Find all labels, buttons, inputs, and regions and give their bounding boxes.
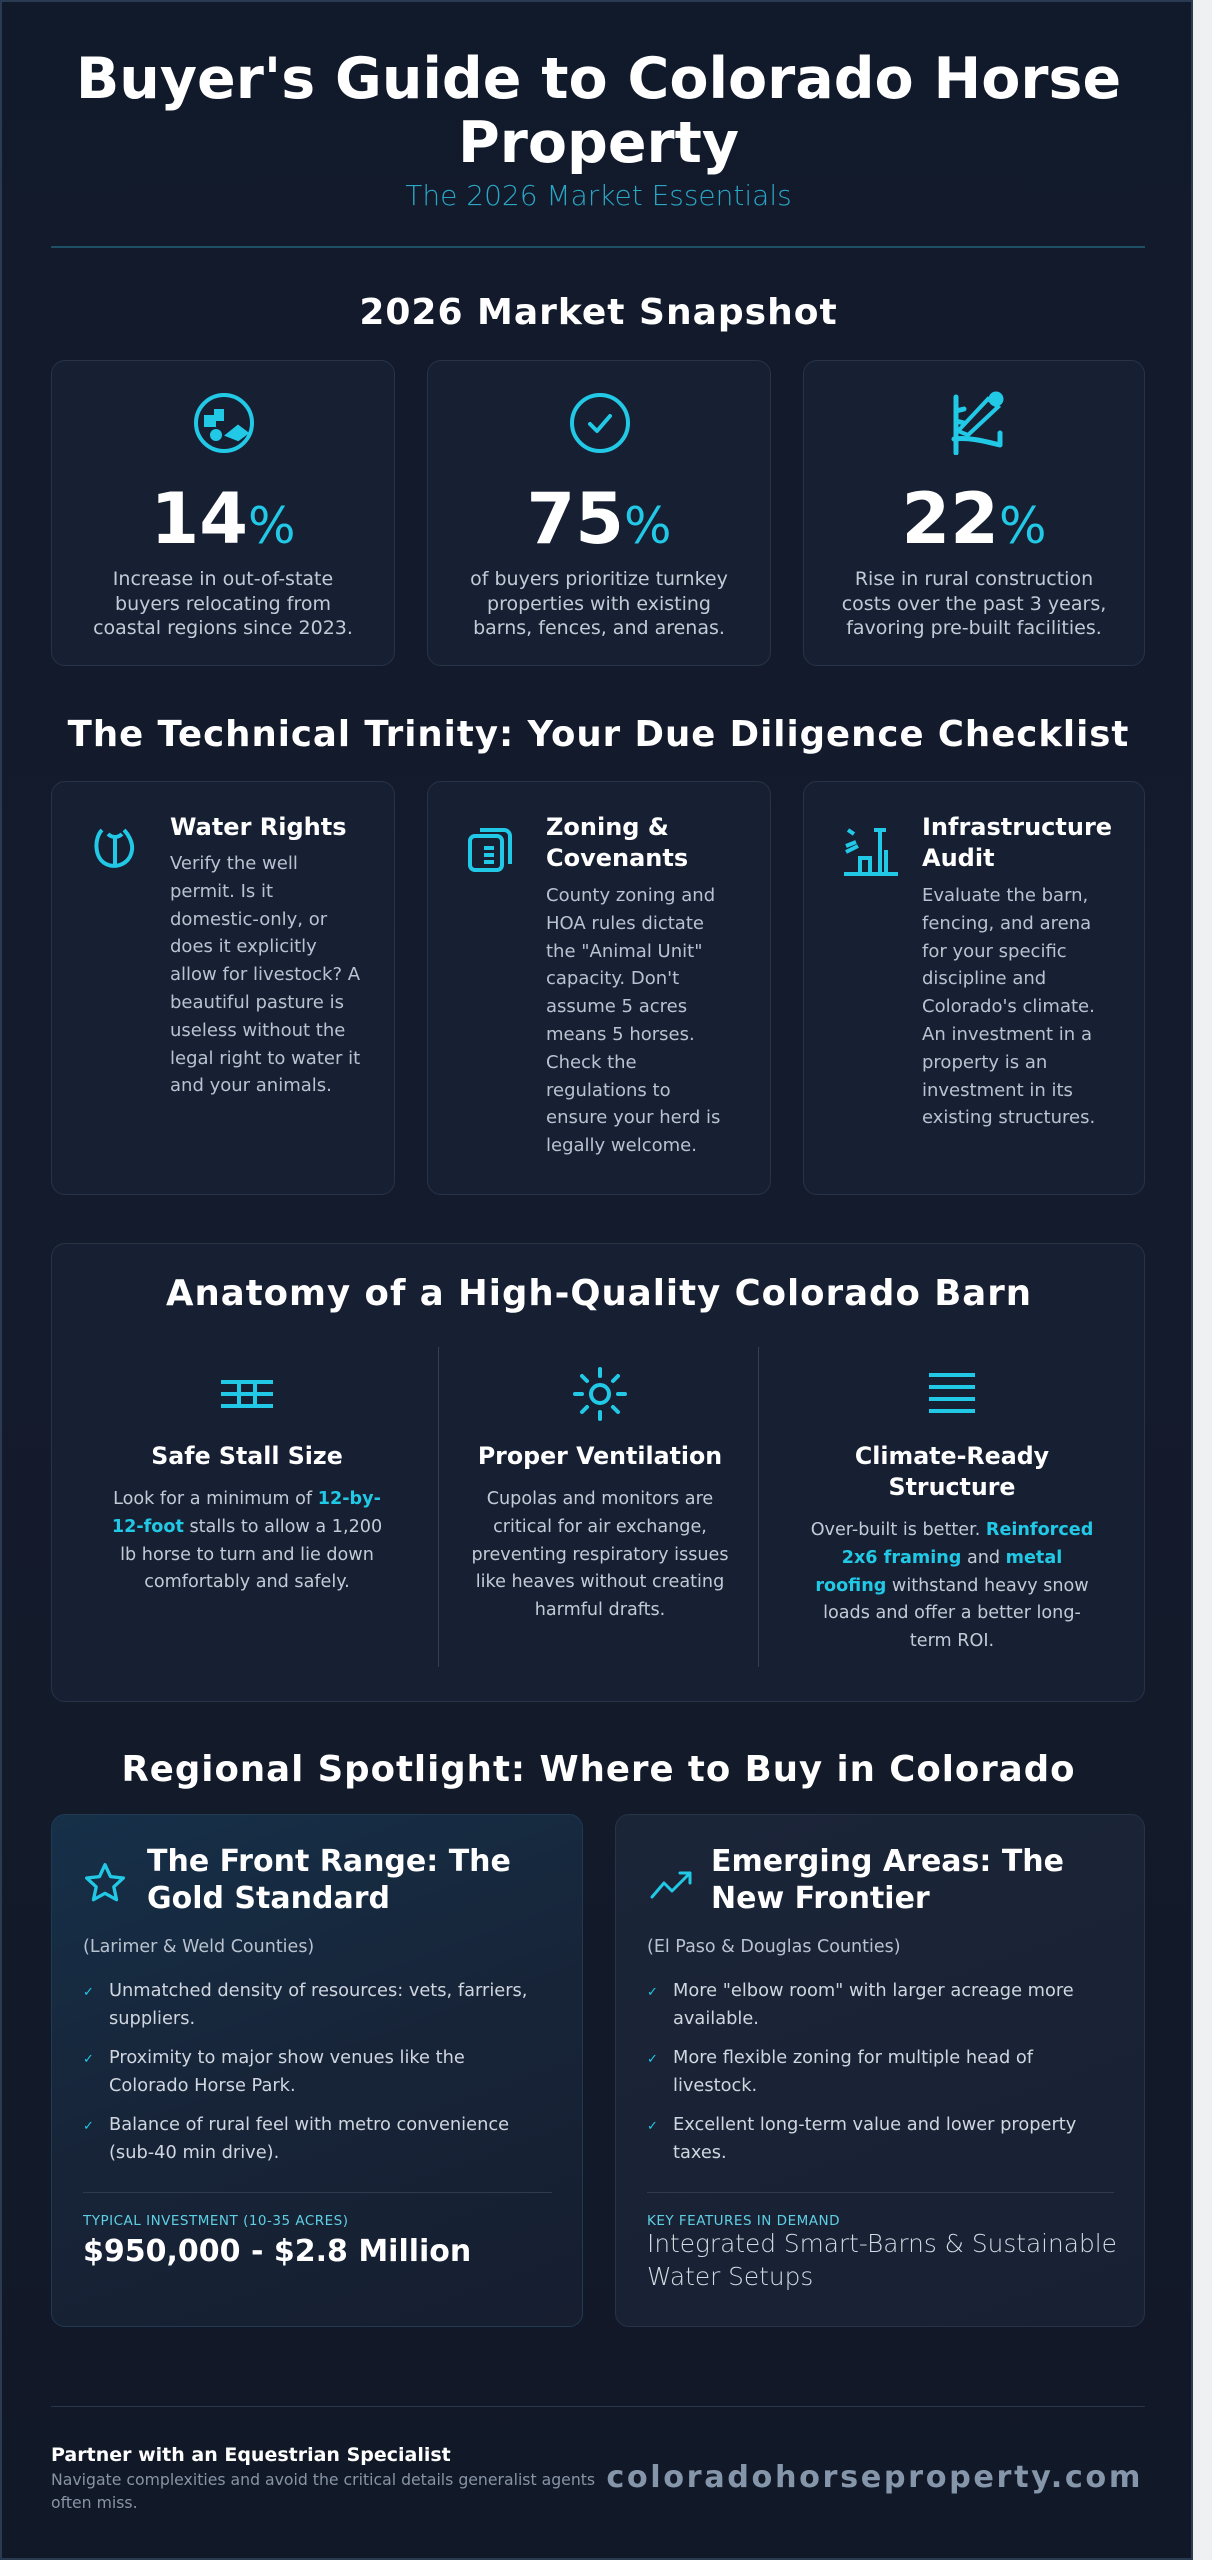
heading: Anatomy of a High-Quality Colorado Barn bbox=[166, 1273, 1032, 1314]
subtitle: The 2026 Market Essentials bbox=[405, 179, 792, 212]
column title: Structure bbox=[889, 1473, 1015, 1501]
stat number: 22% bbox=[902, 478, 1046, 560]
title: Audit bbox=[922, 844, 995, 872]
body: County zoning and HOA rules dictate the "Animal Unit" capacity. Don't assume 5 acres means 5 horses. Check the regulations to ensure your herd is legally welcome. bbox=[546, 885, 720, 1156]
icon: check circle bbox=[570, 393, 630, 453]
title: Covenants bbox=[546, 844, 688, 872]
features value: Water Setups bbox=[647, 2262, 813, 2291]
title bbox=[922, 813, 1112, 872]
column title: Proper Ventilation bbox=[478, 1442, 722, 1470]
column title: Climate-Ready bbox=[855, 1442, 1049, 1470]
icon: infrastructure bbox=[844, 828, 898, 876]
column title bbox=[855, 1442, 1049, 1501]
title: Water Rights bbox=[170, 813, 346, 841]
bullet list: More "elbow room" with larger acreage more available. bbox=[673, 1980, 1074, 2029]
heading: technical trinity: The Technical Trinity: Your Due Diligence Checklist bbox=[68, 714, 1129, 755]
stat description: Rise in rural construction costs over the past 3 years, favoring pre-built facilities. bbox=[842, 568, 1106, 639]
icon: globe bbox=[194, 393, 254, 453]
icon: trend bbox=[650, 1871, 692, 1899]
bullet list bbox=[85, 1980, 527, 2163]
card: emerging areas bbox=[615, 1814, 1145, 2327]
title: Buyer's Guide to Colorado Horse bbox=[76, 46, 1121, 112]
icon: stall bbox=[221, 1380, 273, 1408]
card: front range bbox=[51, 1814, 583, 2327]
footer: url: coloradohorseproperty.com bbox=[606, 2460, 1143, 2495]
stat card 75% bbox=[427, 360, 771, 666]
panel: barn anatomy bbox=[51, 1243, 1145, 1702]
body: Evaluate the barn, fencing, and arena for your specific discipline and Colorado's climate. An investment in a property is an investment in its existing structures. bbox=[922, 885, 1095, 1128]
features value: Integrated Smart-Barns & Sustainable bbox=[647, 2229, 1117, 2258]
icon: star bbox=[84, 1863, 125, 1902]
title: Infrastructure bbox=[922, 813, 1112, 841]
title bbox=[147, 1844, 511, 1916]
bullet list: More flexible zoning for multiple head of livestock. bbox=[673, 2047, 1033, 2096]
stat number: 14% bbox=[151, 478, 295, 560]
stat card 14% bbox=[51, 360, 395, 666]
title bbox=[76, 46, 1121, 176]
footer: call to action: Partner with an Equestrian Specialist bbox=[51, 2444, 451, 2466]
stat description: of buyers prioritize turnkey properties with existing barns, fences, and arenas. bbox=[470, 568, 728, 639]
card: water rights bbox=[51, 781, 395, 1195]
bullet list: Proximity to major show venues like the Colorado Horse Park. bbox=[109, 2047, 465, 2096]
body: Verify the well permit. Is it domestic-only, or does it explicitly allow for livestock? A beautiful pasture is useless without the legal right to water it and your animals. bbox=[170, 853, 360, 1096]
features label: KEY FEATURES IN DEMAND bbox=[647, 2213, 840, 2229]
stat number: 75% bbox=[527, 478, 671, 560]
icon: sun bbox=[573, 1367, 627, 1421]
stat card 22% bbox=[803, 360, 1145, 666]
column title: Safe Stall Size bbox=[151, 1442, 343, 1470]
title: Emerging Areas: The bbox=[711, 1844, 1064, 1879]
footer: call to action: Navigate complexities and avoid the critical details generalist agents often miss. bbox=[51, 2470, 595, 2512]
title bbox=[546, 813, 688, 872]
column: stall size bbox=[112, 1380, 382, 1592]
title: The Front Range: The bbox=[147, 1844, 511, 1879]
bullet list: Balance of rural feel with metro convenience (sub-40 min drive). bbox=[109, 2114, 509, 2163]
title: New Frontier bbox=[711, 1881, 930, 1916]
heading: market snapshot: 2026 Market Snapshot bbox=[359, 292, 838, 333]
column text: Look for a minimum of 12-by-12-foot stalls to allow a 1,200 lb horse to turn and lie down comfortably and safely. bbox=[112, 1489, 382, 1592]
icon: chart bbox=[952, 392, 1004, 455]
card: infrastructure bbox=[803, 781, 1145, 1195]
features value bbox=[647, 2229, 1117, 2291]
column: ventilation bbox=[471, 1367, 729, 1620]
title: Property bbox=[458, 110, 739, 176]
column text: Over-built is better. Reinforced 2x6 framing and metal roofing withstand heavy snow loads and offer a better long-term ROI. bbox=[811, 1520, 1093, 1651]
icon: water bbox=[94, 828, 134, 868]
title: Gold Standard bbox=[147, 1881, 390, 1916]
icon: clipboard bbox=[468, 828, 512, 872]
bullet list bbox=[649, 1980, 1076, 2163]
footer: call to action bbox=[51, 2444, 595, 2512]
bullet list: Unmatched density of resources: vets, farriers, suppliers. bbox=[109, 1980, 527, 2029]
bullet list: Excellent long-term value and lower property taxes. bbox=[673, 2114, 1076, 2163]
column: structure bbox=[811, 1373, 1093, 1651]
investment label: TYPICAL INVESTMENT (10-35 ACRES) bbox=[83, 2213, 349, 2229]
heading: regional spotlight: Regional Spotlight: Where to Buy in Colorado bbox=[121, 1749, 1076, 1790]
card: zoning bbox=[427, 781, 771, 1195]
icon: lines bbox=[929, 1373, 975, 1413]
stat description: Increase in out-of-state buyers relocating from coastal regions since 2023. bbox=[93, 568, 353, 639]
title: Zoning & bbox=[546, 813, 669, 841]
counties: (Larimer & Weld Counties) bbox=[83, 1937, 314, 1957]
counties: (El Paso & Douglas Counties) bbox=[647, 1937, 901, 1957]
column text: Cupolas and monitors are critical for air exchange, preventing respiratory issues like heaves without creating harmful drafts. bbox=[471, 1489, 729, 1620]
title bbox=[711, 1844, 1064, 1916]
investment value: $950,000 - $2.8 Million bbox=[83, 2234, 471, 2269]
